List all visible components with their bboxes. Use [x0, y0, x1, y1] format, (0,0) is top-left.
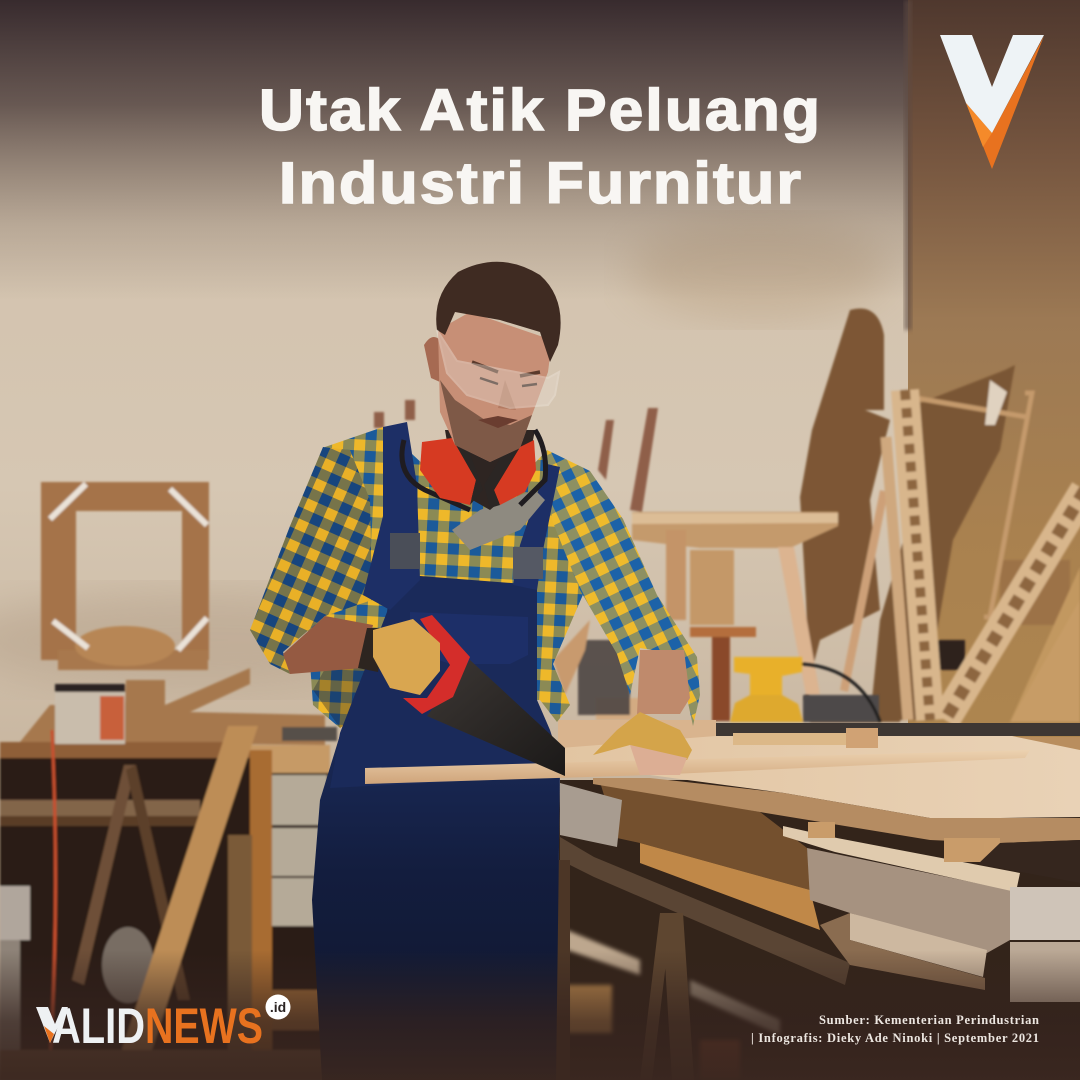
source credits	[751, 1013, 1039, 1045]
dark bar	[560, 837, 850, 985]
overalls bib	[330, 576, 565, 788]
right strap	[513, 464, 560, 590]
title	[259, 78, 822, 216]
hearing protection	[402, 430, 546, 510]
blurred stuff under the table	[567, 930, 780, 1080]
left strap and flap	[363, 422, 420, 610]
person: carpenter sawing wood	[250, 262, 700, 1080]
head and beard	[438, 312, 552, 462]
logo: Valid News .id: NEWS	[145, 998, 263, 1054]
source credits: | Infografis: Dieky Ade Ninoki | September 2021	[751, 1031, 1039, 1045]
shirt torso	[300, 427, 600, 728]
safety glasses	[437, 330, 559, 408]
undershirt and collar	[452, 490, 545, 550]
wooden frame on the left wall	[41, 482, 209, 670]
title: Utak Atik Peluang	[259, 78, 822, 143]
forearm viewer-left	[283, 616, 373, 674]
facial features	[472, 362, 540, 428]
hair	[436, 262, 561, 362]
brown panel	[600, 782, 810, 890]
logo: Valid News .id: ALID	[52, 998, 145, 1054]
trousers	[312, 735, 560, 1080]
sander tool	[730, 657, 880, 722]
left workbench and shelves	[0, 668, 337, 1080]
orange strip	[640, 843, 820, 930]
title: Industri Furnitur	[279, 151, 803, 216]
table front edge	[593, 778, 1080, 843]
logo: Valid News .id: .id	[270, 999, 286, 1015]
source credits: Sumber: Kementerian Perindustrian	[819, 1013, 1039, 1027]
right shadow and white panel	[978, 840, 1080, 883]
mallet	[733, 733, 846, 745]
shirt sleeve viewer-left	[250, 447, 372, 674]
wood board being sawn	[365, 750, 1030, 784]
pale block	[850, 913, 987, 977]
logo: V mark	[940, 35, 1044, 169]
grey panel	[560, 783, 622, 847]
table top surface	[560, 736, 1080, 818]
shadow on lower shirt	[313, 630, 390, 728]
workbench table with planks	[555, 720, 1080, 1080]
bottom dark gradient overlay	[0, 950, 1080, 1080]
shirt sleeve viewer-right	[547, 450, 700, 726]
hand saw	[403, 615, 565, 776]
gloved hand on saw	[358, 619, 440, 695]
neck	[445, 430, 535, 510]
ear	[424, 337, 440, 382]
bib pocket	[410, 612, 528, 664]
grey wood panel	[807, 848, 1010, 953]
stools, round table and wall planks on the right	[374, 308, 1080, 722]
pale bar	[783, 826, 1020, 892]
forearm viewer-right	[637, 650, 690, 714]
gloved hand on board	[593, 712, 692, 775]
logo: Valid News .id	[36, 994, 290, 1054]
